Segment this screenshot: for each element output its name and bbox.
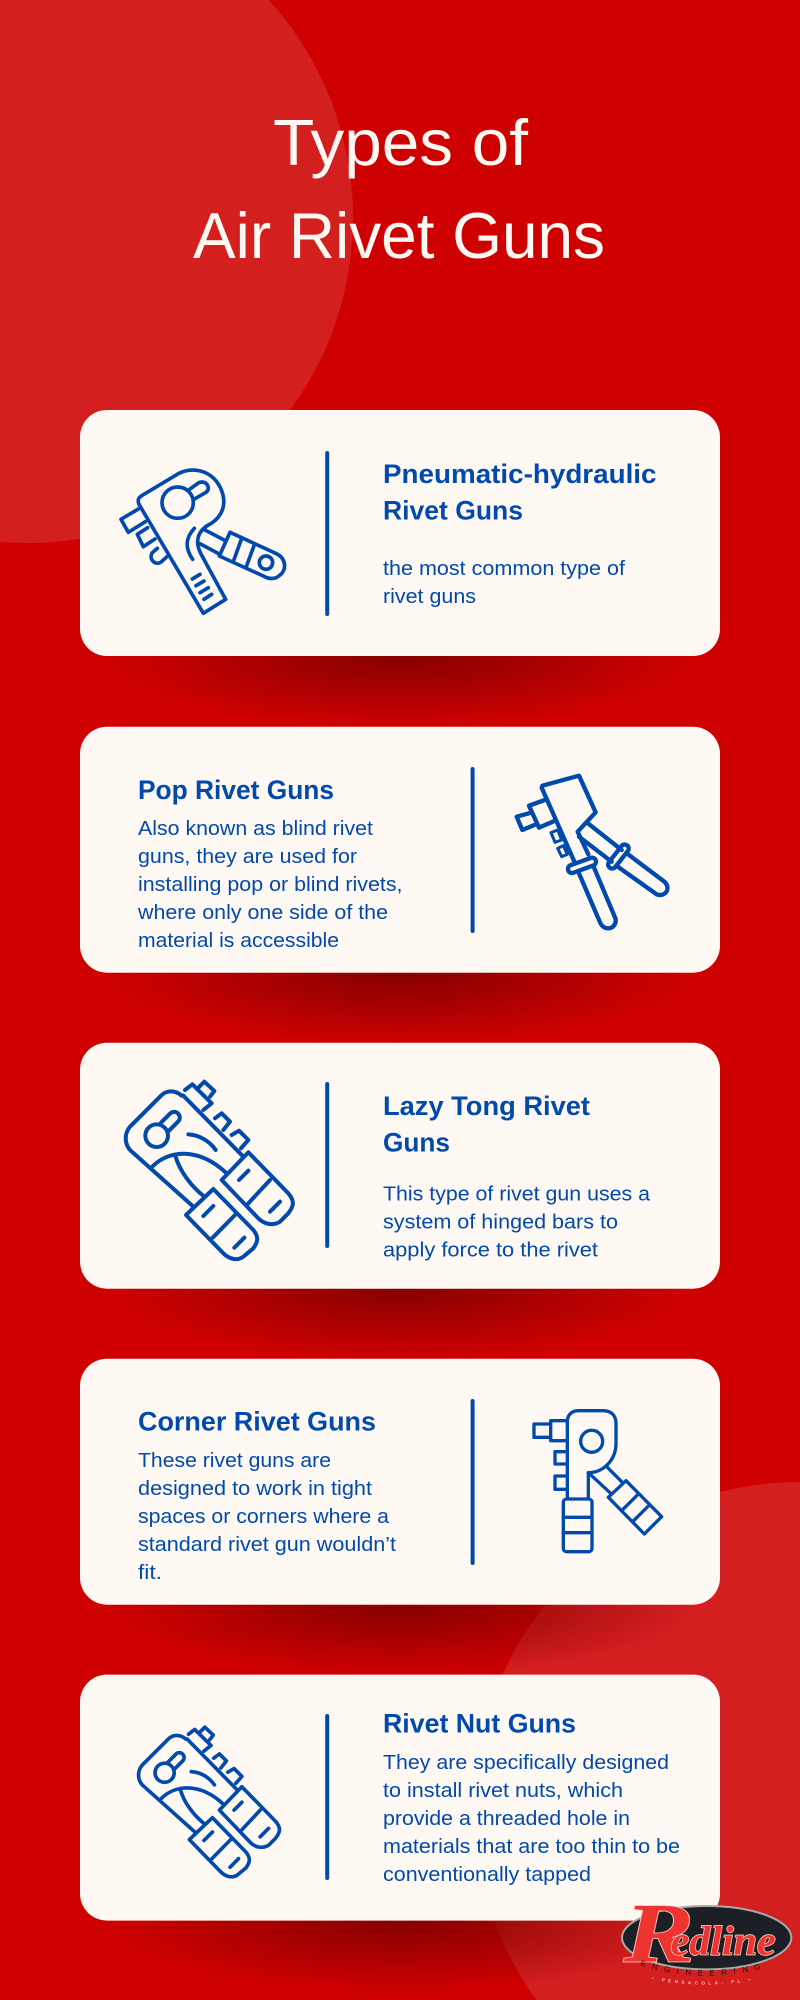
logo wordmark: R [623, 1887, 694, 1981]
logo wordmark [623, 1887, 776, 1981]
description: fit. [138, 1561, 162, 1584]
card shadow [105, 1216, 695, 1360]
logo ellipse [622, 1906, 791, 1969]
divider [325, 1084, 329, 1246]
divider [471, 769, 475, 931]
description: materials that are too thin to be [383, 1835, 680, 1858]
card shadow [105, 1532, 695, 1676]
description: standard rivet gun wouldn’t [138, 1533, 396, 1556]
panel: pop rivet guns [80, 727, 720, 1045]
card shadow [105, 901, 695, 1045]
description: the most common type of [383, 557, 625, 580]
icon: pop rivet gun [517, 776, 667, 928]
heading: Pop Rivet Guns [138, 775, 334, 805]
description: conventionally tapped [383, 1863, 591, 1886]
description: This type of rivet gun uses a [383, 1182, 651, 1205]
logo: Redline Engineering [621, 1887, 792, 1985]
description: system of hinged bars to [383, 1210, 618, 1233]
description: provide a threaded hole in [383, 1807, 630, 1830]
card background [80, 1359, 720, 1605]
card background [80, 727, 720, 973]
description: apply force to the rivet [383, 1238, 598, 1261]
description: installing pop or blind rivets, [138, 873, 402, 896]
panel: rivet nut guns [80, 1675, 720, 1993]
divider [325, 453, 329, 614]
card background [80, 1043, 720, 1289]
description [383, 557, 625, 608]
heading: Lazy Tong Rivet [383, 1091, 590, 1121]
description [137, 817, 402, 952]
description: spaces or corners where a [138, 1505, 390, 1528]
card background [80, 1675, 720, 1921]
card background [80, 410, 720, 656]
panel: corner rivet guns [80, 1359, 720, 1676]
logo location: • PENSACOLA, FL • [652, 1978, 750, 1985]
description: to install rivet nuts, which [383, 1779, 623, 1802]
background circle top left [0, 0, 353, 543]
panel: pneumatic-hydraulic rivet guns [80, 410, 720, 728]
description: They are specifically designed [383, 1751, 669, 1774]
description: material is accessible [138, 929, 339, 952]
description: These rivet guns are [138, 1449, 331, 1472]
icon: rivet nut gun [139, 1727, 279, 1877]
description: designed to work in tight [138, 1477, 372, 1500]
heading: Corner Rivet Guns [138, 1407, 376, 1437]
heading: Rivet Nut Guns [383, 1709, 576, 1739]
divider [471, 1401, 475, 1563]
background circle bottom right [474, 1482, 800, 2000]
title: Air Rivet Guns [193, 199, 605, 272]
panel: lazy tong rivet guns [80, 1043, 720, 1360]
icon: corner rivet gun [534, 1411, 662, 1552]
divider [325, 1716, 329, 1878]
heading [383, 459, 656, 526]
heading: Rivet Guns [383, 496, 523, 526]
heading: Pneumatic-hydraulic [383, 459, 656, 489]
description: guns, they are used for [138, 845, 357, 868]
heading: Guns [383, 1128, 450, 1158]
card shadow [105, 584, 695, 728]
icon: pneumatic-hydraulic rivet gun [121, 470, 285, 613]
heading [383, 1091, 590, 1158]
title [193, 106, 605, 272]
card shadow [105, 1849, 695, 1993]
logo wordmark: edline [671, 1919, 776, 1965]
description: where only one side of the [137, 901, 388, 924]
description [383, 1751, 680, 1886]
description [383, 1182, 651, 1261]
description [138, 1449, 396, 1584]
logo subtitle: ENGINEERING [640, 1960, 760, 1976]
description: Also known as blind rivet [138, 817, 373, 840]
title: Types of [273, 106, 529, 179]
description: rivet guns [383, 585, 476, 608]
icon: lazy tong rivet gun [126, 1082, 293, 1259]
